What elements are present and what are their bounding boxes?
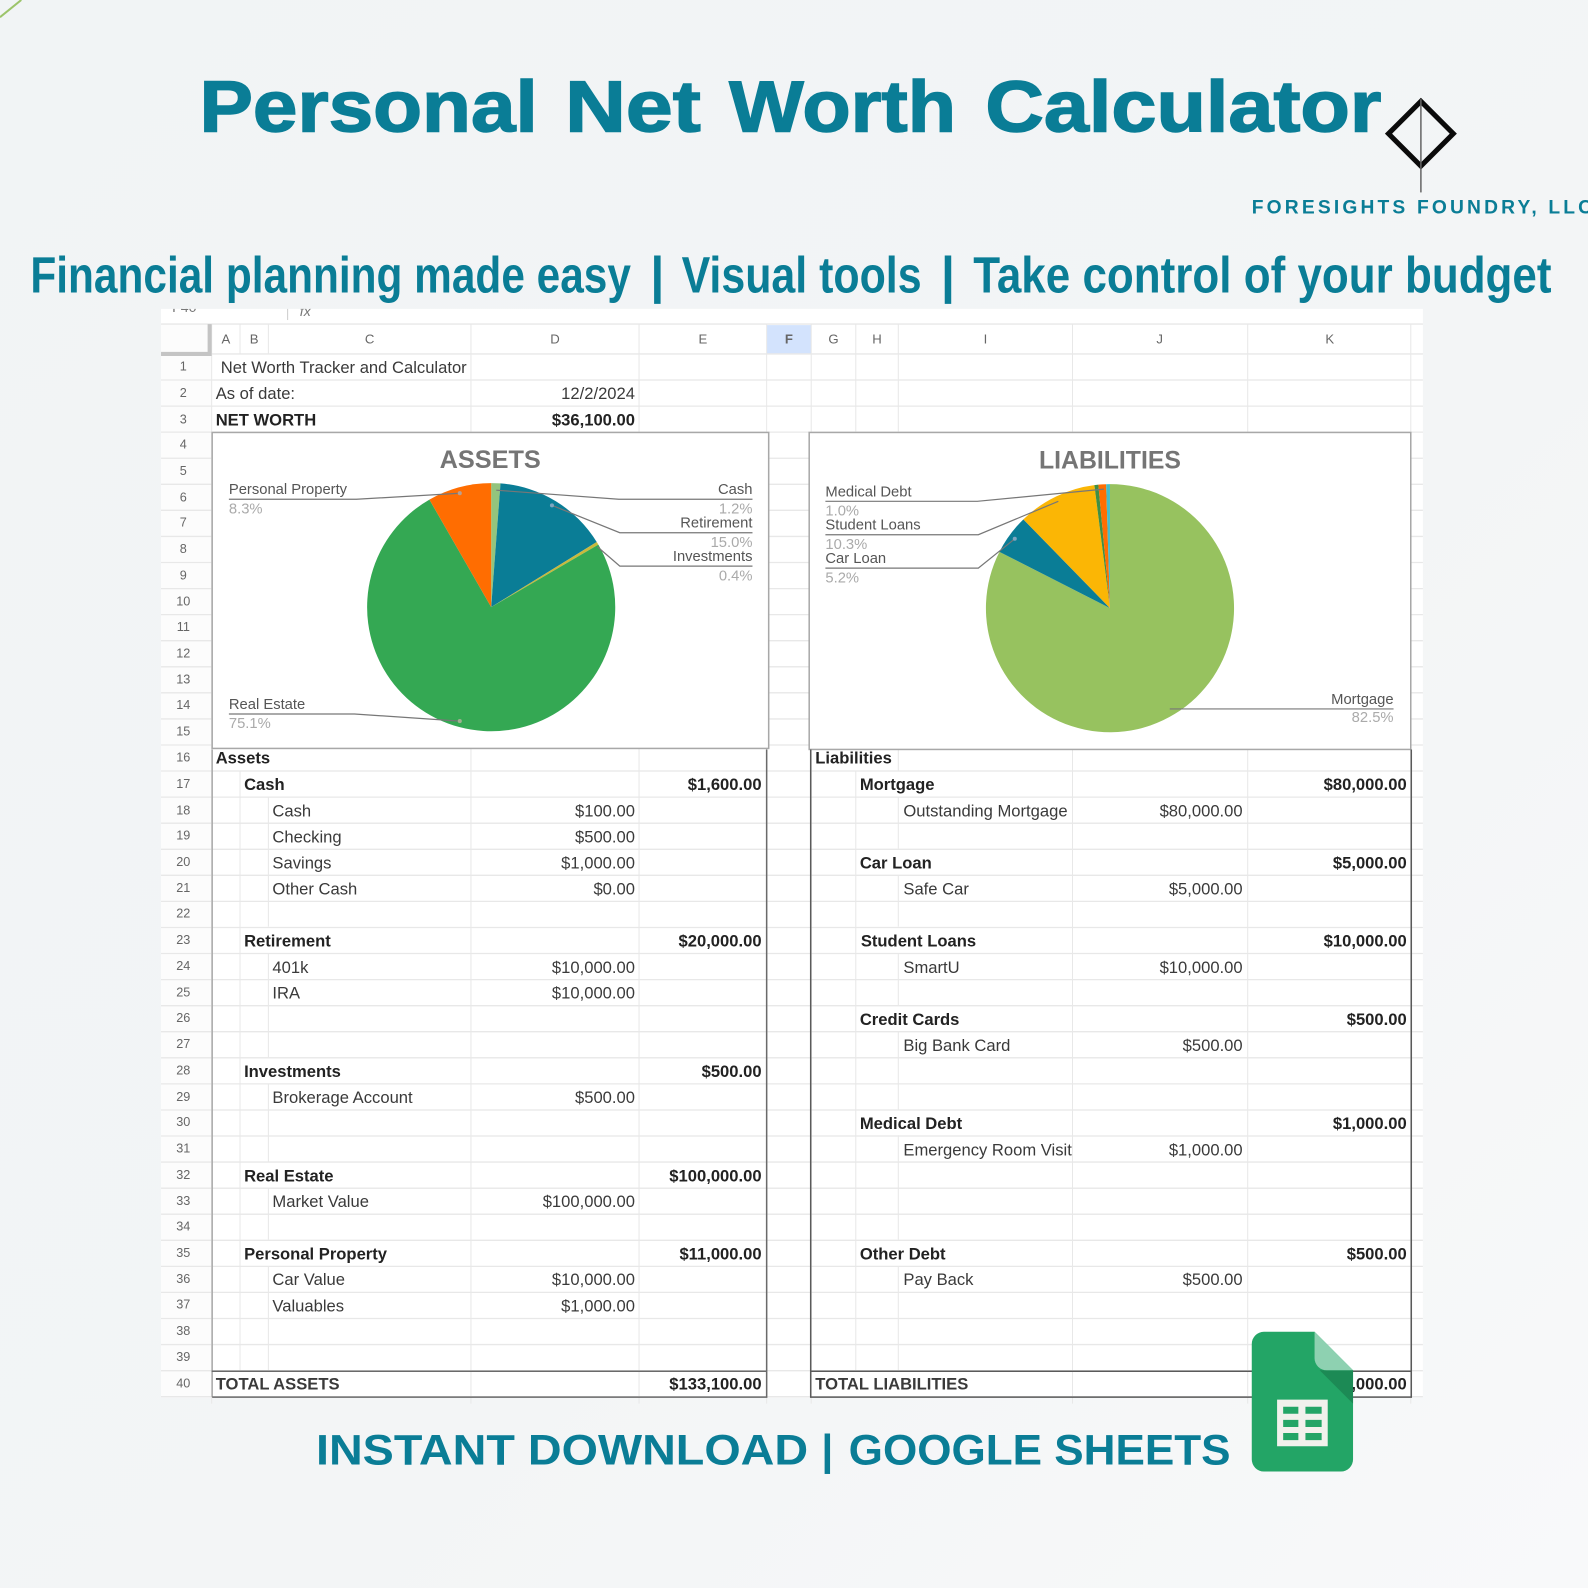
table: assets: $100,000.00 bbox=[543, 1192, 635, 1211]
label: car loan bbox=[825, 537, 1017, 586]
row numbers: 11 bbox=[177, 620, 190, 634]
table: liabilities: $500.00 bbox=[1183, 1036, 1243, 1055]
table: assets: Valuables bbox=[272, 1297, 344, 1316]
row numbers: 25 bbox=[176, 986, 190, 1000]
table: liabilities: Pay Back bbox=[903, 1270, 974, 1289]
label: investments bbox=[598, 547, 752, 584]
pie: liabilities bbox=[986, 484, 1234, 732]
table: assets: Car Value bbox=[272, 1270, 345, 1289]
pie: assets bbox=[367, 483, 615, 731]
table: assets: $1,000.00 bbox=[561, 1297, 635, 1316]
table: assets: $10,000.00 bbox=[552, 958, 635, 977]
sheet heading rows: $36,100.00 bbox=[552, 410, 635, 429]
sheet heading rows: As of date: bbox=[216, 384, 295, 403]
table: liabilities: SmartU bbox=[903, 958, 960, 977]
sheet heading rows: NET WORTH bbox=[216, 410, 316, 429]
table: assets: $10,000.00 bbox=[552, 984, 635, 1003]
row numbers: 9 bbox=[180, 568, 187, 582]
label: car loan: Car Loan bbox=[825, 551, 886, 567]
row numbers: 28 bbox=[176, 1064, 190, 1078]
table: liabilities: Mortgage bbox=[860, 775, 935, 794]
table: liabilities: $10,000.00 bbox=[1324, 931, 1407, 950]
footer call to action: GOOGLE SHEETS bbox=[849, 1426, 1230, 1474]
table: assets: 401k bbox=[272, 958, 309, 977]
title: Worth bbox=[729, 68, 956, 148]
table: assets: $1,600.00 bbox=[688, 775, 762, 794]
label: retirement bbox=[550, 503, 752, 551]
row numbers: 35 bbox=[176, 1246, 190, 1260]
table: liabilities: $80,000.00 bbox=[1160, 801, 1243, 820]
table: assets: $133,100.00 bbox=[669, 1375, 762, 1394]
table: assets: $100.00 bbox=[575, 801, 635, 820]
row numbers: 37 bbox=[176, 1297, 190, 1311]
title: Personal bbox=[200, 68, 538, 148]
row numbers: 26 bbox=[176, 1011, 190, 1025]
table: liabilities bbox=[810, 749, 1411, 1397]
row numbers: 19 bbox=[176, 829, 190, 843]
row numbers: 27 bbox=[176, 1037, 190, 1051]
company name: FORESIGHTS FOUNDRY, LLC bbox=[1252, 198, 1588, 219]
label: personal property bbox=[229, 482, 462, 517]
table: liabilities: Car Loan bbox=[860, 853, 932, 872]
table: liabilities: Emergency Room Visit bbox=[903, 1141, 1072, 1160]
label: personal property: 8.3% bbox=[229, 501, 263, 517]
row numbers: 14 bbox=[176, 698, 190, 712]
table: liabilities: $1,000.00 bbox=[1169, 1141, 1243, 1160]
chart title: assets: ASSETS bbox=[440, 446, 541, 474]
panel: liabilities pie chart bbox=[809, 432, 1411, 749]
label: medical debt: 1.0% bbox=[825, 503, 859, 519]
row numbers: 10 bbox=[176, 595, 190, 609]
table: assets: Investments bbox=[244, 1062, 341, 1081]
label: student loans: 10.3% bbox=[825, 537, 867, 553]
row numbers: 36 bbox=[176, 1272, 190, 1286]
table: assets: Cash bbox=[272, 801, 311, 820]
icon: Foresights Foundry diamond logo bbox=[1388, 99, 1453, 192]
table: liabilities: Credit Cards bbox=[860, 1010, 959, 1029]
row numbers: 16 bbox=[176, 751, 190, 765]
title bbox=[200, 68, 1381, 148]
column headers: F bbox=[785, 331, 793, 346]
label: cash: 1.2% bbox=[719, 501, 752, 517]
table: liabilities: $500.00 bbox=[1347, 1244, 1407, 1263]
table: assets: $500.00 bbox=[702, 1062, 762, 1081]
row numbers: 4 bbox=[180, 438, 187, 452]
footer call to action: | bbox=[821, 1426, 833, 1474]
row numbers: 3 bbox=[180, 412, 187, 426]
label: student loans bbox=[825, 501, 1058, 553]
subtitle: | bbox=[650, 247, 664, 305]
column headers: C bbox=[365, 331, 374, 346]
footer call to action: INSTANT DOWNLOAD bbox=[316, 1426, 808, 1474]
row numbers: 15 bbox=[176, 724, 190, 738]
table: assets: TOTAL ASSETS bbox=[216, 1375, 340, 1394]
table: liabilities: $80,000.00 bbox=[1324, 775, 1407, 794]
column headers: E bbox=[698, 331, 707, 346]
row numbers: 39 bbox=[176, 1350, 190, 1364]
subtitle bbox=[30, 247, 1552, 305]
table: liabilities: Liabilities bbox=[815, 749, 892, 768]
table: assets: Real Estate bbox=[244, 1166, 334, 1185]
label: cash: Cash bbox=[718, 482, 752, 498]
column headers: K bbox=[1325, 331, 1334, 346]
row numbers: 34 bbox=[176, 1219, 190, 1233]
label: real estate bbox=[229, 697, 462, 732]
subtitle: Visual tools bbox=[682, 247, 922, 304]
table: assets: Market Value bbox=[272, 1192, 369, 1211]
sheet heading rows: Net Worth Tracker and Calculator bbox=[221, 358, 467, 377]
label: medical debt: Medical Debt bbox=[825, 484, 912, 500]
column headers: G bbox=[828, 331, 839, 346]
label: real estate: Real Estate bbox=[229, 697, 305, 713]
table: assets: Assets bbox=[216, 749, 270, 768]
label: cash bbox=[496, 482, 752, 517]
panel: spreadsheet bbox=[161, 300, 1423, 1404]
row numbers: 20 bbox=[176, 855, 190, 869]
table: assets: $1,000.00 bbox=[561, 853, 635, 872]
label: mortgage: 82.5% bbox=[1352, 710, 1394, 726]
label: investments: Investments bbox=[673, 549, 752, 565]
label: personal property: Personal Property bbox=[229, 482, 348, 498]
row numbers bbox=[176, 360, 190, 1390]
table: assets: Personal Property bbox=[244, 1244, 388, 1263]
table: liabilities: TOTAL LIABILITIES bbox=[815, 1375, 968, 1394]
row numbers: 12 bbox=[176, 646, 190, 660]
table: liabilities: $500.00 bbox=[1347, 1010, 1407, 1029]
table: assets: Checking bbox=[272, 828, 342, 847]
table: liabilities: Medical Debt bbox=[860, 1114, 963, 1133]
column headers: D bbox=[550, 331, 560, 346]
table: assets: $20,000.00 bbox=[679, 931, 762, 950]
subtitle: | bbox=[941, 247, 955, 305]
subtitle: Financial planning made easy bbox=[30, 247, 631, 304]
row numbers: 7 bbox=[180, 516, 187, 530]
row numbers: 8 bbox=[180, 542, 187, 556]
row numbers: 2 bbox=[180, 386, 187, 400]
label: real estate: 75.1% bbox=[229, 716, 271, 732]
table: liabilities: $500.00 bbox=[1183, 1270, 1243, 1289]
label: medical debt bbox=[825, 484, 1104, 519]
table: liabilities: $1,000.00 bbox=[1333, 1114, 1407, 1133]
row numbers: 1 bbox=[180, 360, 187, 374]
row numbers: 29 bbox=[176, 1090, 190, 1104]
table: liabilities: $10,000.00 bbox=[1160, 958, 1243, 977]
table: liabilities: Other Debt bbox=[860, 1244, 946, 1263]
table: liabilities: $5,000.00 bbox=[1333, 853, 1407, 872]
table: liabilities: $5,000.00 bbox=[1169, 879, 1243, 898]
row numbers: 21 bbox=[176, 881, 190, 895]
table: assets: $11,000.00 bbox=[679, 1244, 762, 1263]
row numbers: 18 bbox=[176, 803, 190, 817]
label: mortgage: Mortgage bbox=[1331, 692, 1394, 708]
label: car loan: 5.2% bbox=[825, 570, 859, 586]
row numbers: 38 bbox=[176, 1324, 190, 1338]
table: assets: $500.00 bbox=[575, 1088, 635, 1107]
row numbers: 33 bbox=[176, 1194, 190, 1208]
label: retirement: 15.0% bbox=[711, 535, 752, 551]
table: liabilities: Outstanding Mortgage bbox=[903, 801, 1068, 820]
row numbers: 32 bbox=[176, 1168, 190, 1182]
column headers: I bbox=[984, 331, 987, 346]
panel: assets pie chart bbox=[212, 432, 769, 748]
label: student loans: Student Loans bbox=[825, 518, 921, 534]
column headers: H bbox=[872, 331, 882, 346]
panel: spreadsheet: fx bbox=[300, 304, 312, 320]
footer call to action bbox=[316, 1426, 1230, 1474]
row numbers: 31 bbox=[176, 1142, 190, 1156]
row numbers: 13 bbox=[176, 673, 190, 687]
table: assets: IRA bbox=[272, 984, 301, 1003]
row numbers: 30 bbox=[176, 1115, 190, 1129]
table: assets: $500.00 bbox=[575, 828, 635, 847]
table: assets: $0.00 bbox=[593, 879, 635, 898]
icon: Google Sheets bbox=[1252, 1332, 1353, 1472]
row numbers: 23 bbox=[176, 933, 190, 947]
table: assets: Other Cash bbox=[272, 879, 357, 898]
table: liabilities: Student Loans bbox=[861, 931, 976, 950]
column headers: J bbox=[1156, 331, 1163, 346]
column headers: B bbox=[250, 331, 259, 346]
row numbers: 22 bbox=[176, 907, 190, 921]
table: assets: Cash bbox=[244, 775, 285, 794]
row numbers: 5 bbox=[180, 464, 187, 478]
chart title: liabilities: LIABILITIES bbox=[1039, 447, 1181, 474]
title: Calculator bbox=[985, 68, 1381, 148]
table: assets: $10,000.00 bbox=[552, 1270, 635, 1289]
panel: spreadsheet: F40 bbox=[172, 300, 197, 316]
label: investments: 0.4% bbox=[719, 568, 752, 584]
table: liabilities: Safe Car bbox=[903, 879, 969, 898]
table: assets: Brokerage Account bbox=[272, 1088, 413, 1107]
row numbers: 17 bbox=[176, 777, 190, 791]
row numbers: 24 bbox=[176, 959, 190, 973]
label: retirement: Retirement bbox=[680, 516, 752, 532]
sheet heading rows: 12/2/2024 bbox=[561, 384, 635, 403]
table: assets: Savings bbox=[272, 853, 331, 872]
sheet heading rows bbox=[216, 358, 635, 429]
table: assets: Retirement bbox=[244, 931, 331, 950]
table: liabilities: $97,000.00 bbox=[1324, 1375, 1407, 1394]
table: assets: $100,000.00 bbox=[669, 1166, 762, 1185]
column headers bbox=[221, 331, 1334, 346]
row numbers: 6 bbox=[180, 490, 187, 504]
title: Net bbox=[565, 68, 701, 148]
column headers: A bbox=[221, 331, 230, 346]
table: liabilities: Big Bank Card bbox=[903, 1036, 1010, 1055]
label: mortgage bbox=[1170, 692, 1394, 726]
row numbers: 40 bbox=[176, 1376, 190, 1390]
table: assets bbox=[212, 749, 767, 1397]
